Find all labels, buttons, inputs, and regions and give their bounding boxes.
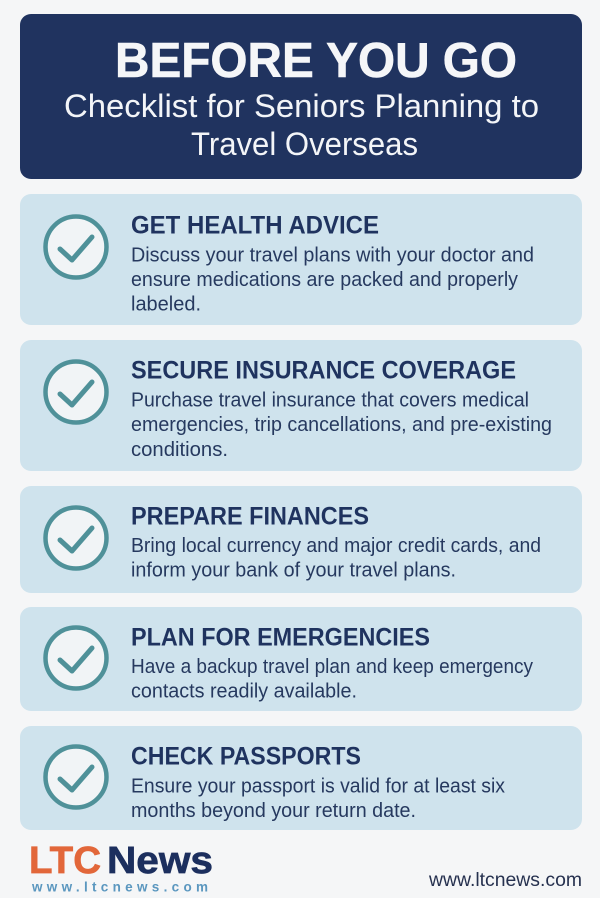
heading: get health advice: GET HEALTH ADVICE xyxy=(131,212,379,240)
text: get health advice xyxy=(131,244,534,316)
panel: secure insurance coverage xyxy=(20,340,582,471)
text: secure insurance coverage: Purchase travel insurance that covers medical xyxy=(131,390,529,412)
panel: prepare finances xyxy=(20,486,582,593)
text: plan for emergencies: contacts readily available. xyxy=(131,680,357,702)
logo: LTC News: News xyxy=(107,840,213,882)
text: get health advice: labeled. xyxy=(131,294,201,316)
icon: check circle xyxy=(46,216,106,278)
heading: secure insurance coverage: SECURE INSURANCE COVERAGE xyxy=(131,356,516,384)
icon: check circle xyxy=(46,746,106,808)
text: get health advice: ensure medications are packed and properly xyxy=(131,269,518,291)
text: check passports: Ensure your passport is valid for at least six xyxy=(131,776,505,798)
text: prepare finances: inform your bank of your travel plans. xyxy=(131,560,456,582)
text: plan for emergencies: Have a backup travel plan and keep emergency xyxy=(131,656,533,678)
panel: plan for emergencies xyxy=(20,607,582,711)
logo: LTC News: LTC xyxy=(29,840,101,882)
text: get health advice: Discuss your travel plans with your doctor and xyxy=(131,244,534,266)
icon: check circle xyxy=(46,508,106,568)
icon: check circle xyxy=(46,362,106,422)
subtitle: Checklist for Seniors Planning to xyxy=(64,88,539,124)
text: check passports: months beyond your return date. xyxy=(131,800,416,822)
subtitle: Travel Overseas xyxy=(191,126,418,162)
website url: www.ltcnews.com xyxy=(428,870,582,891)
subtitle xyxy=(64,88,539,162)
text: prepare finances: Bring local currency and major credit cards, and xyxy=(131,535,541,557)
heading: plan for emergencies: PLAN FOR EMERGENCIES xyxy=(131,624,430,652)
text: secure insurance coverage: conditions. xyxy=(131,439,228,461)
panel: get health advice xyxy=(20,194,582,325)
text: check passports xyxy=(131,776,505,822)
icon: check circle xyxy=(46,628,106,688)
heading: check passports: CHECK PASSPORTS xyxy=(131,742,361,770)
title: BEFORE YOU GO xyxy=(115,34,517,88)
panel: check passports xyxy=(20,726,582,830)
text: prepare finances xyxy=(131,535,541,582)
logo: LTC News xyxy=(29,840,213,894)
text: secure insurance coverage xyxy=(131,390,552,461)
heading: prepare finances: PREPARE FINANCES xyxy=(131,502,369,530)
header banner xyxy=(20,14,582,179)
text: plan for emergencies xyxy=(131,656,533,702)
text: secure insurance coverage: emergencies, trip cancellations, and pre-existing xyxy=(131,414,552,436)
logo: LTC News: www.ltcnews.com xyxy=(31,880,208,894)
